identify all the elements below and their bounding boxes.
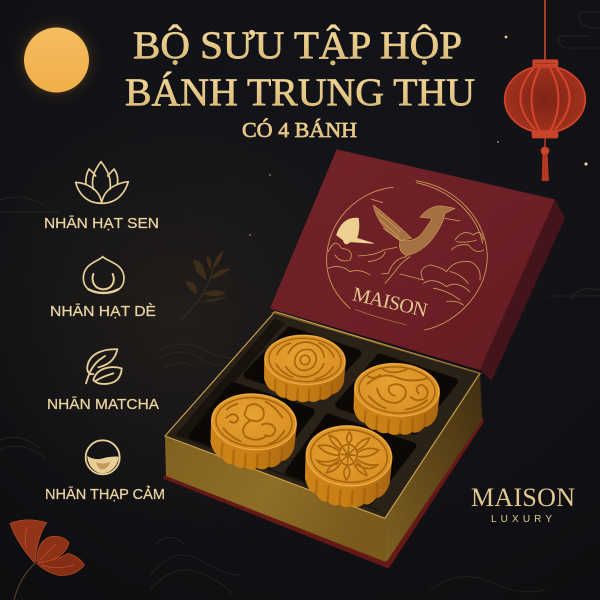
icon: chestnut xyxy=(83,257,124,293)
cake: swirl pattern xyxy=(351,360,442,438)
ingredient: lotus seed: NHĀN HẠT SEN xyxy=(44,215,159,232)
ingredient: chestnut xyxy=(50,257,156,320)
title xyxy=(125,23,475,142)
icon: lotus xyxy=(76,162,128,203)
cake: flower pattern xyxy=(302,422,394,510)
logo: Maison Luxury: LUXURY xyxy=(491,514,552,525)
phoenix xyxy=(373,205,455,256)
box lid: MAISON xyxy=(351,283,430,322)
ingredient: matcha xyxy=(47,349,159,413)
icon: bowl xyxy=(86,440,120,474)
icon: matcha leaves xyxy=(86,349,122,384)
clouds xyxy=(452,245,483,252)
cake: rose pattern xyxy=(262,333,347,404)
ingredient: chestnut: NHĀN HẠT DÈ xyxy=(50,303,156,320)
box base xyxy=(163,312,484,569)
cake: dragon pattern xyxy=(208,390,299,473)
title: BỘ SƯU TẬP HỘP xyxy=(133,23,462,67)
branch leaf xyxy=(10,520,84,600)
ingredient: lotus seed xyxy=(44,162,159,232)
lantern xyxy=(505,0,585,181)
moon xyxy=(10,14,102,106)
title: BÁNH TRUNG THU xyxy=(125,70,475,114)
ingredient: mixed xyxy=(45,440,165,503)
lid emblem xyxy=(327,181,487,330)
box lid xyxy=(270,149,565,381)
sprig decoration xyxy=(181,251,231,319)
gift box xyxy=(163,149,565,569)
title: CÓ 4 BÁNH xyxy=(242,118,357,142)
logo: Maison Luxury xyxy=(471,483,575,525)
ingredient: matcha: NHĀN MATCHA xyxy=(47,396,159,413)
trays xyxy=(193,331,454,501)
logo: Maison Luxury: MAISON xyxy=(471,483,575,512)
ingredient: mixed: NHĀN THẠP CẢM xyxy=(45,486,165,503)
